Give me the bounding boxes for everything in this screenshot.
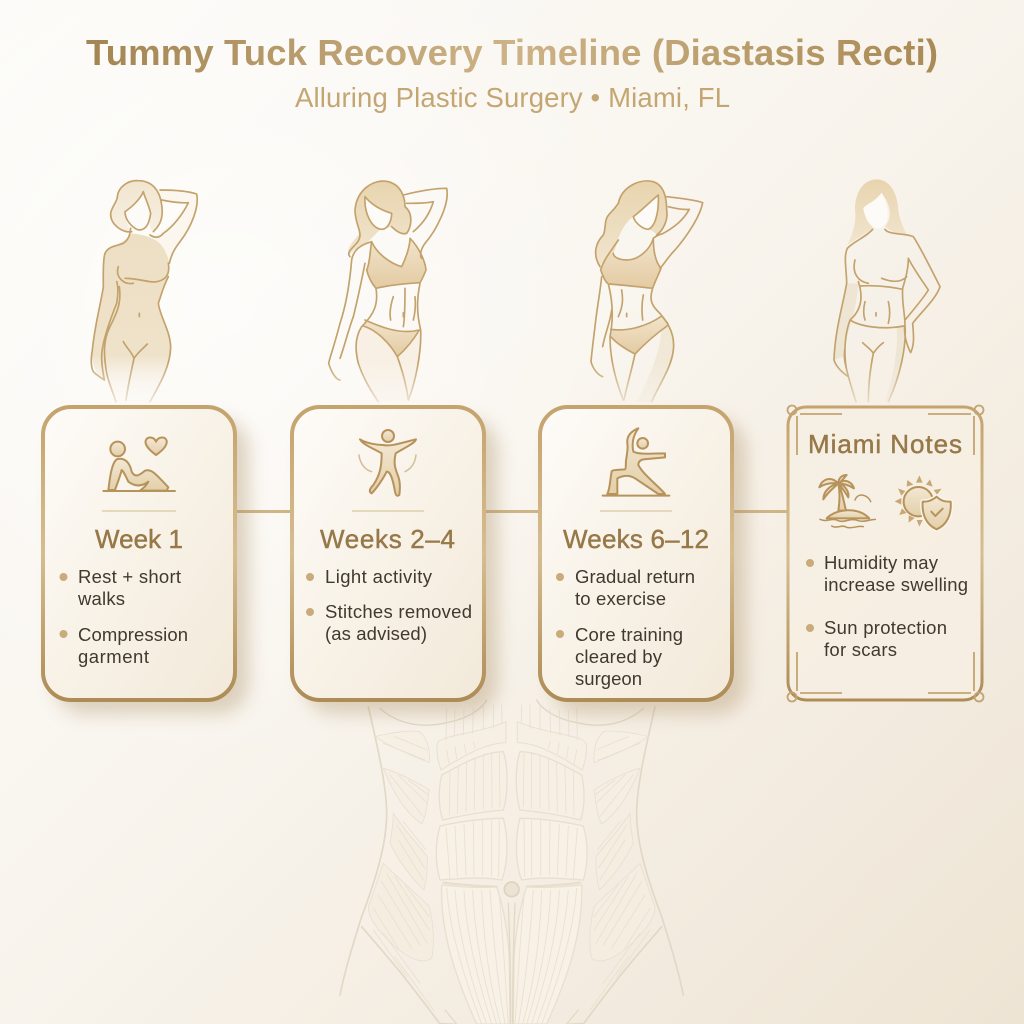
bullet list: week 1: garment bbox=[78, 646, 149, 667]
panel: weeks 2-4 bbox=[292, 407, 498, 714]
bullet list: weeks 6-12: Gradual return bbox=[575, 566, 695, 587]
icon: moving figure bbox=[359, 430, 416, 496]
figure: weeks 2-4 silhouette bbox=[329, 181, 447, 402]
subtitle: Alluring Plastic Surgery • Miami, FL bbox=[295, 82, 730, 113]
heading: weeks 2-4: Weeks 2–4 bbox=[320, 524, 455, 554]
title: Tummy Tuck Recovery Timeline (Diastasis Recti) bbox=[86, 32, 938, 73]
figure: final result silhouette bbox=[834, 179, 940, 402]
bullet list: Miami notes: Sun protection bbox=[824, 617, 947, 638]
icon: palm island bbox=[819, 475, 875, 528]
icon: resting figure with heart bbox=[103, 438, 175, 491]
bullet list: weeks 2-4: (as advised) bbox=[325, 623, 427, 644]
bullet list: week 1: Compression bbox=[78, 624, 188, 645]
bullet list: weeks 2-4: Light activity bbox=[325, 566, 433, 587]
heading: Miami notes: Miami Notes bbox=[808, 429, 962, 459]
heading: week 1: Week 1 bbox=[95, 524, 183, 554]
abdominal muscle illustration bbox=[340, 700, 683, 1024]
bullet list: week 1 bbox=[60, 566, 188, 667]
bullet list: weeks 6-12: Core training bbox=[575, 624, 683, 645]
bullet list: weeks 6-12: to exercise bbox=[575, 588, 666, 609]
heading: weeks 6-12: Weeks 6–12 bbox=[563, 524, 709, 554]
bullet list: Miami notes bbox=[806, 552, 968, 660]
navel bbox=[504, 882, 519, 897]
icon: sun with shield bbox=[895, 475, 951, 529]
icon: lunge pose figure bbox=[603, 428, 669, 496]
panel: Miami notes bbox=[788, 406, 984, 702]
panel: weeks 6-12 bbox=[540, 407, 746, 714]
figure: week 1 silhouette bbox=[91, 181, 197, 403]
bullet list: weeks 2-4: Stitches removed bbox=[325, 601, 472, 622]
bullet list: Miami notes: increase swelling bbox=[824, 574, 968, 595]
bullet list: weeks 2-4 bbox=[306, 566, 472, 644]
bullet list: week 1: Rest + short bbox=[78, 566, 181, 587]
bullet list: Miami notes: Humidity may bbox=[824, 552, 939, 573]
connector: weeks 6-12 to Miami notes bbox=[733, 510, 789, 513]
bullet list: Miami notes: for scars bbox=[824, 639, 897, 660]
bullet list: weeks 6-12: surgeon bbox=[575, 668, 642, 689]
ornamental frame details bbox=[788, 406, 984, 702]
bullet list: weeks 6-12 bbox=[556, 566, 695, 689]
panel: week 1 bbox=[43, 407, 249, 714]
bullet list: weeks 6-12: cleared by bbox=[575, 646, 663, 667]
bullet list: week 1: walks bbox=[77, 588, 125, 609]
figure: weeks 6-12 silhouette bbox=[591, 181, 703, 402]
connector: week 1 to weeks 2-4 bbox=[236, 510, 292, 513]
connector: weeks 2-4 to weeks 6-12 bbox=[485, 510, 540, 513]
